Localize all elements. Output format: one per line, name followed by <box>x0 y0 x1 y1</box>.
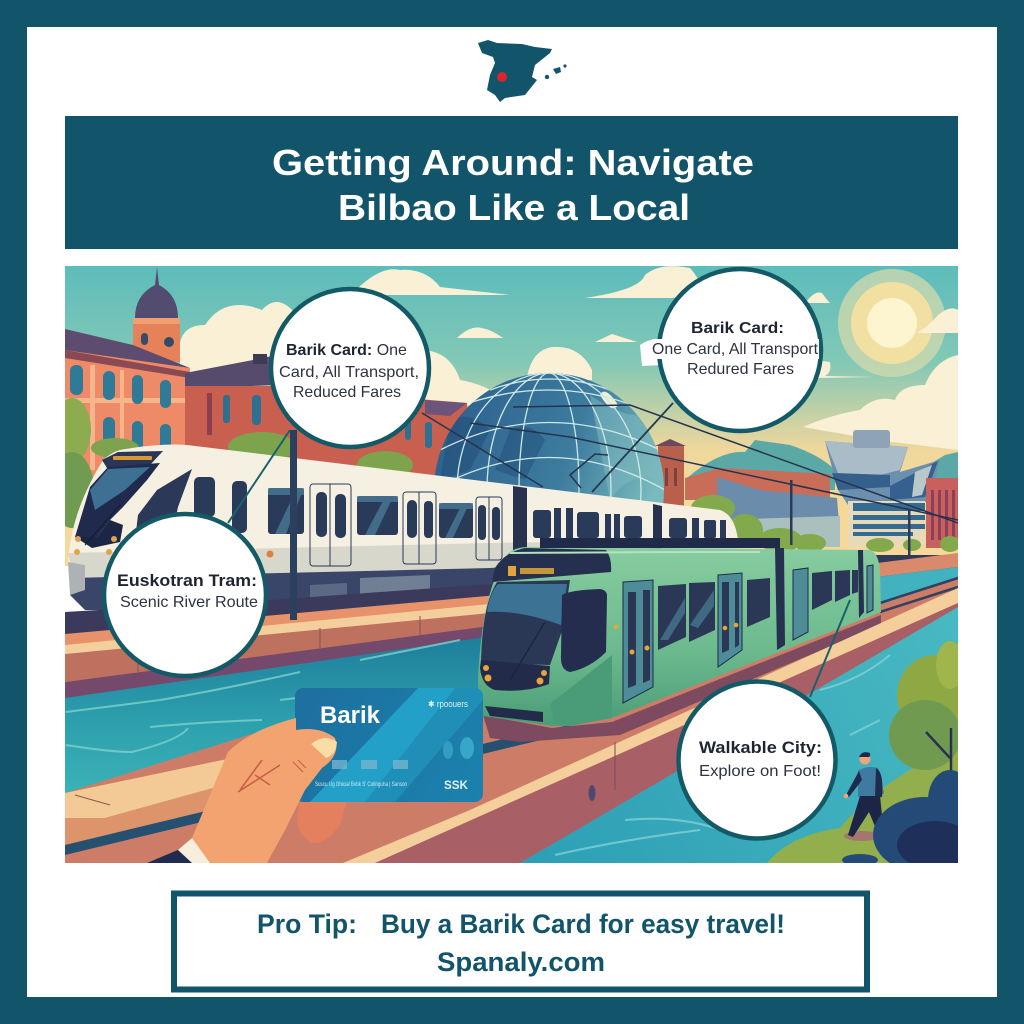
second red building <box>185 354 470 480</box>
callout: Euskotran Tram <box>104 514 266 676</box>
terracotta tower <box>656 439 686 506</box>
callout: Walkable City: Explore on Foot! <box>699 763 821 780</box>
walking person <box>844 752 884 841</box>
left orange building with tower <box>65 267 190 480</box>
connector: Barik Card right to train <box>592 403 673 492</box>
pro tip box: Buy a Barik Card for easy travel! <box>381 909 785 939</box>
upper platform <box>65 582 520 700</box>
dark bushes <box>842 770 958 863</box>
glass dome <box>435 373 664 503</box>
Guggenheim museum <box>825 430 940 547</box>
callout: Barik Card left: Barik Card: One <box>286 342 407 359</box>
callout: Barik Card right: Barik Card: <box>691 320 784 337</box>
Barik card: Barik <box>320 702 381 729</box>
callout: Barik Card right <box>652 269 821 431</box>
Barik card: Suscu Ug Ghicial Bvbk S' Cotinguha | Sanson <box>315 782 407 788</box>
trees behind white train <box>228 432 413 472</box>
Barik card: SSK <box>444 778 468 792</box>
callout: Barik Card right: One Card, All Transport <box>652 341 819 358</box>
main platform edge and wall <box>343 588 958 863</box>
right rails <box>880 578 958 612</box>
callout: Walkable City: Walkable City: <box>699 739 822 757</box>
clouds <box>179 266 958 450</box>
distant red buildings <box>685 468 830 500</box>
overhead wires <box>422 405 958 523</box>
green tram <box>478 538 881 726</box>
white train <box>68 445 738 612</box>
callout: Barik Card left: Reduced Fares <box>293 384 401 401</box>
left greenery <box>65 398 139 528</box>
grass bank <box>767 745 958 863</box>
sun <box>838 269 946 377</box>
title banner: Getting Around: Navigate <box>272 142 754 183</box>
glass building <box>717 477 838 520</box>
icon: Spain map with location dot <box>478 40 567 102</box>
river left <box>65 638 482 793</box>
hand holding card <box>147 718 337 863</box>
callout: Barik Card left: Card, All Transport, <box>279 364 419 381</box>
title banner <box>65 116 958 249</box>
callout: Euskotran Tram: Euskotran Tram: <box>117 572 257 590</box>
shadow under green train <box>483 615 881 742</box>
tree <box>889 641 958 770</box>
river right <box>520 607 958 863</box>
pro tip box: Spanaly.com <box>437 947 605 977</box>
riverside trees <box>691 495 960 552</box>
callout: Euskotran Tram: Scenic River Route <box>120 594 258 611</box>
Barik card: ✱ rpoouers <box>428 699 468 709</box>
pro tip box: Pro Tip: <box>257 909 357 939</box>
distant mountains <box>687 440 835 490</box>
back rails and bank <box>876 553 958 605</box>
lower left platform <box>65 578 958 863</box>
connector: Walkable City to tram <box>810 600 850 697</box>
illustration: Bilbao transport scene <box>50 266 977 873</box>
brick building right <box>926 478 958 548</box>
title banner: Bilbao Like a Local <box>338 187 690 228</box>
callout: Barik Card right: Redured Fares <box>687 361 794 378</box>
callout: Barik Card left <box>271 289 429 447</box>
pole and connector at Barik circle <box>228 430 297 620</box>
sky <box>65 266 958 566</box>
hand fingers <box>297 800 347 843</box>
pro tip box <box>174 894 867 990</box>
poles <box>790 480 910 555</box>
callout: Walkable City <box>678 682 836 838</box>
Barik card <box>295 688 483 802</box>
